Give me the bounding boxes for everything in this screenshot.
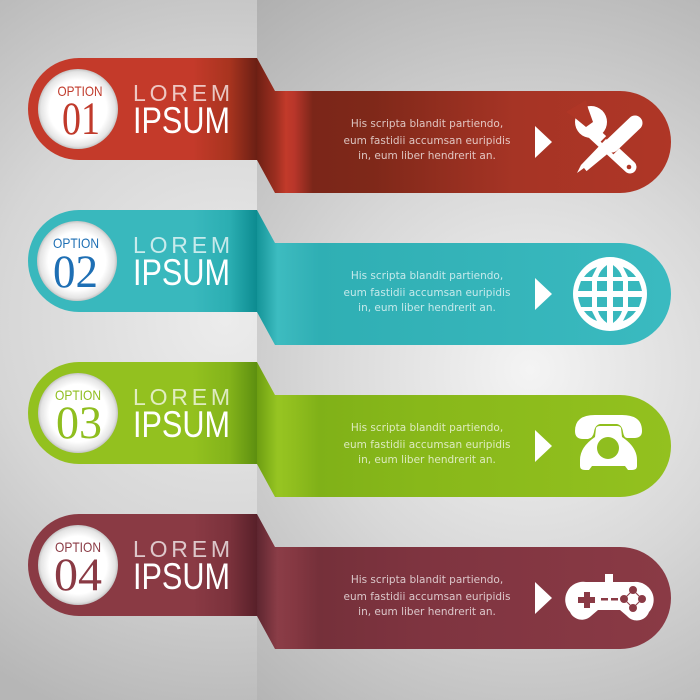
body text: eum fastidii accumsan euripidis [344,287,510,299]
heading [133,232,230,293]
ribbon right band [257,210,671,345]
option badge [38,69,118,149]
ribbon right band [257,362,671,497]
body text: His scripta blandit partiendo, [351,574,503,586]
icon: tools [566,100,635,173]
panel: option 04 ribbon [28,514,671,649]
option badge [38,373,118,453]
body text [344,422,510,466]
heading: IPSUM [133,100,230,141]
option badge: 02 [53,246,98,298]
icon: globe [573,257,647,331]
heading: IPSUM [133,252,230,293]
body text: in, eum liber hendrerit an. [358,150,496,162]
body text [344,270,510,314]
heading: LOREM [133,80,230,106]
option badge [37,221,117,301]
panel: option 03 ribbon [28,362,671,497]
body text: in, eum liber hendrerit an. [358,302,496,314]
body text: His scripta blandit partiendo, [351,422,503,434]
ribbon right band [257,58,671,193]
ribbon left band [28,362,257,464]
option badge: 01 [62,93,100,145]
panel: option 02 ribbon [28,210,671,345]
heading [133,536,230,597]
heading: IPSUM [133,556,230,597]
option badge: 03 [56,397,102,449]
icon: game controller [565,574,654,620]
ribbon left band [28,58,257,160]
ribbon right band [257,514,671,649]
body text [344,574,510,618]
ribbon left band [28,514,257,616]
arrow [535,430,552,462]
option badge: OPTION [53,235,99,251]
body text: eum fastidii accumsan euripidis [344,591,510,603]
heading [133,80,230,141]
background: left panel [0,0,257,700]
body text: eum fastidii accumsan euripidis [344,439,510,451]
body text: eum fastidii accumsan euripidis [344,135,510,147]
body text: His scripta blandit partiendo, [351,118,503,130]
heading [133,384,230,445]
arrow [535,582,552,614]
ribbon left band [28,210,257,312]
background: right panel [257,0,700,700]
option badge: OPTION [55,539,101,555]
heading: LOREM [133,384,230,410]
body text: in, eum liber hendrerit an. [358,606,496,618]
option badge: OPTION [55,387,101,403]
heading: IPSUM [133,404,230,445]
heading: LOREM [133,232,230,258]
arrow [535,126,552,158]
option badge [38,525,118,605]
body text: in, eum liber hendrerit an. [358,454,496,466]
option badge: 04 [54,549,102,601]
body text: His scripta blandit partiendo, [351,270,503,282]
option badge: OPTION [58,83,102,99]
body text [344,118,510,162]
arrow [535,278,552,310]
icon: telephone [575,415,642,470]
panel: option 01 ribbon [28,58,671,193]
heading: LOREM [133,536,230,562]
